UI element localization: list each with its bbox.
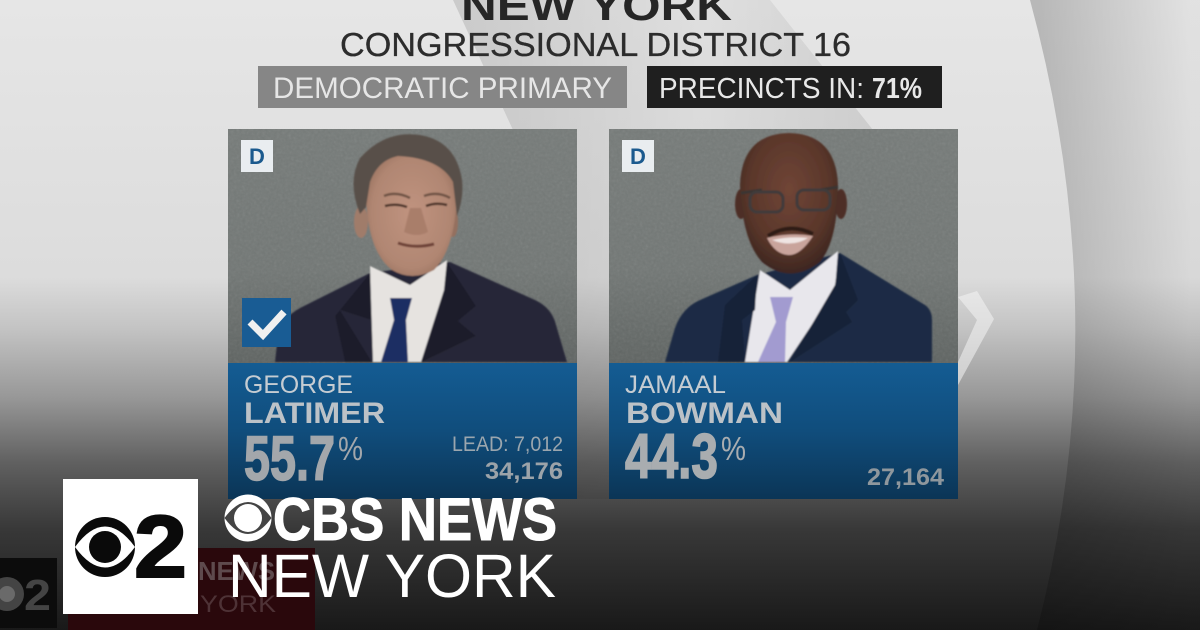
heading: district: CONGRESSIONAL DISTRICT 16 [340,26,851,63]
results bar: Bowman: 44.3 [625,422,718,492]
panel: Jamaal Bowman [609,129,958,499]
results bar: Bowman [609,363,958,499]
results bar: Bowman: JAMAAL [625,371,726,399]
party badge: D: D [249,144,265,169]
icon: CBS eye [75,517,135,577]
label: Democratic primary: DEMOCRATIC PRIMARY [273,72,612,105]
background screen: faded red panel: NEWS [198,556,275,586]
candidate photo: Latimer [228,129,577,363]
label: precincts in: 71% [872,73,922,105]
results bar: Bowman: % [721,430,746,467]
results bar: Bowman: BOWMAN [626,397,783,430]
background screen: faded station logo [0,558,57,628]
panel: George Latimer [228,129,577,499]
background screen: faded red panel: YORK [200,591,276,618]
logo: CBS News New York: CBS NEWS [273,486,557,553]
label: precincts in: PRECINCTS IN: [659,73,864,105]
results bar: Latimer: 34,176 [485,458,563,485]
results bar: Latimer: LATIMER [244,397,385,430]
icon: CBS eye white [224,494,272,542]
results bar: Bowman: 27,164 [867,464,945,491]
logo: CBS 2 [63,479,198,614]
results bar: Latimer [228,363,577,499]
party badge: D: D [630,144,646,169]
logo: CBS News New York: NEW YORK [228,542,556,610]
candidate photo: Bowman [609,129,958,363]
logo: CBS 2: 2 [134,497,187,596]
party badge: D [622,140,654,172]
background screen: faded station logo: 2 [24,571,51,620]
logo: CBS News New York [224,486,557,610]
results bar: Latimer: 55.7 [244,424,335,494]
background screen: faded red panel [68,548,315,630]
icon: winner check mark [242,298,291,347]
label: precincts in [647,66,942,108]
results bar: Latimer: GEORGE [244,371,353,399]
results bar: Latimer: % [338,430,363,467]
party badge: D [241,140,273,172]
results bar: Latimer: LEAD: 7,012 [452,433,563,456]
